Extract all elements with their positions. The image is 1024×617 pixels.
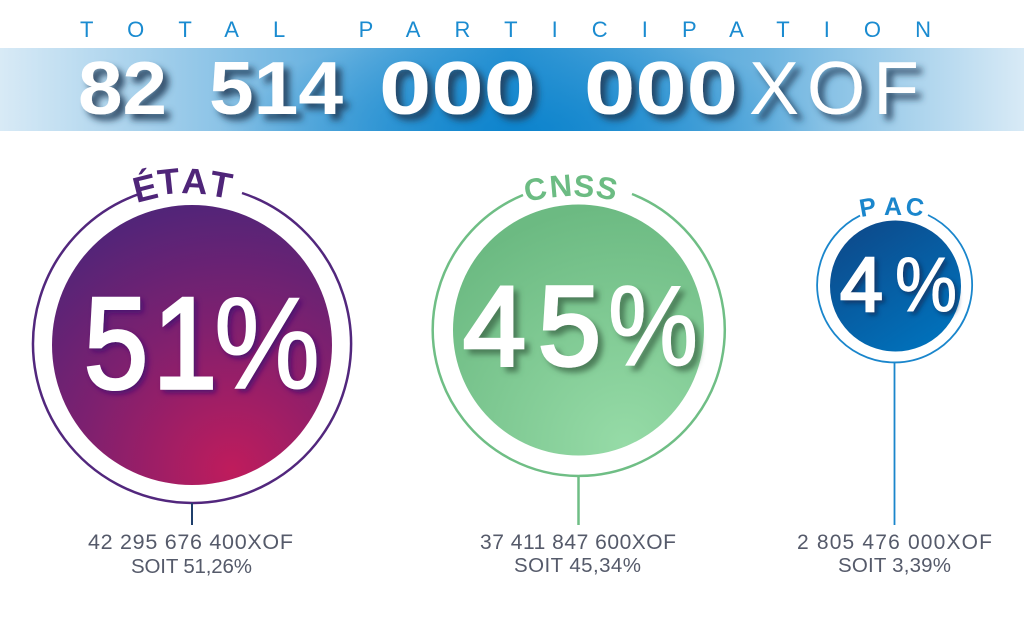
circle: CNSS xyxy=(453,204,704,456)
percentage: 51%: 1 xyxy=(153,270,217,416)
share: PAC: SOIT 3,39% xyxy=(838,554,951,577)
label: État: ÉTAT xyxy=(129,160,235,211)
amount: CNSS: 37 411 847 600XOF xyxy=(480,531,676,554)
connector line: PAC xyxy=(894,362,896,525)
panel: PAC xyxy=(797,192,992,577)
ring: État xyxy=(33,193,351,503)
total amount value: 000 xyxy=(584,46,738,130)
amount: État: 42 295 676 400XOF xyxy=(88,530,293,554)
total amount value: XOF xyxy=(749,46,919,130)
percentage: 51% xyxy=(84,270,320,416)
panel: CNSS xyxy=(433,168,725,577)
panel: État xyxy=(33,160,351,578)
label: CNSS: CNSS xyxy=(521,168,621,209)
percentage: 4% xyxy=(840,242,957,328)
total amount value xyxy=(78,46,919,130)
heading: total participation: TOTAL PARTICIPATION xyxy=(80,17,931,42)
label: PAC: PAC xyxy=(857,192,926,223)
connector line: CNSS xyxy=(577,476,580,525)
total amount value: 514 xyxy=(209,46,343,130)
total amount value: 000 xyxy=(379,46,536,130)
circle: PAC xyxy=(830,220,961,352)
amount: PAC: 2 805 476 000XOF xyxy=(797,531,992,554)
percentage: 45% xyxy=(463,263,698,389)
circle: État xyxy=(52,205,332,485)
ring: PAC xyxy=(817,215,972,362)
connector line: État xyxy=(191,503,193,525)
percentage: 4%: 4 xyxy=(840,242,883,328)
total amount value: 82 xyxy=(78,46,167,130)
percentage: 45%: 5 xyxy=(538,263,601,389)
percentage: 51%: % xyxy=(214,270,320,416)
percentage: 45%: 4 xyxy=(463,263,526,389)
share: État: SOIT 51,26% xyxy=(131,555,252,578)
percentage: 4%: % xyxy=(895,242,957,328)
percentage: 51%: 5 xyxy=(84,270,148,416)
banner: total amount xyxy=(0,46,1024,131)
share: CNSS: SOIT 45,34% xyxy=(514,554,641,577)
ring: CNSS xyxy=(433,194,725,476)
percentage: 45%: % xyxy=(608,263,698,389)
